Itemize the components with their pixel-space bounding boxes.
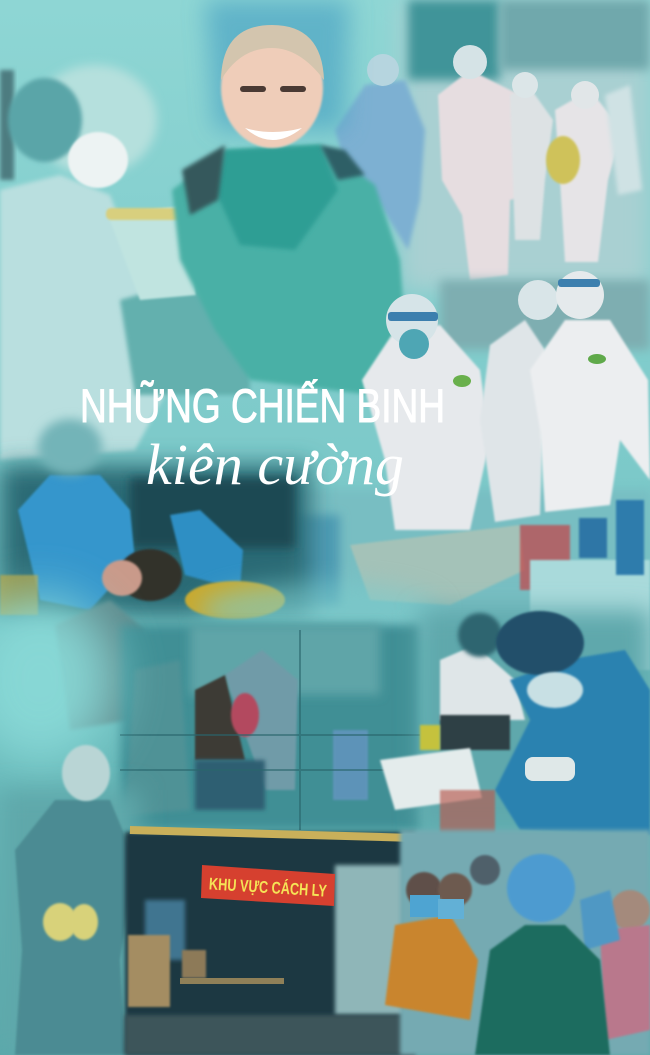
photo: field testing scene — [120, 625, 420, 830]
light haze band — [200, 582, 440, 638]
photo: left nurse with face shield — [0, 65, 250, 460]
photo: middle right team in white suits — [362, 271, 650, 530]
icon: water bottles — [579, 500, 644, 575]
photo: top right PPE team — [335, 0, 650, 290]
title: NHỮNG CHIẾN BINH — [80, 379, 445, 432]
left haze — [0, 595, 115, 765]
photo: patient bed — [290, 490, 650, 670]
photo: standing worker in gown — [0, 745, 140, 1055]
photo: crowd and green-scrub nurse — [385, 830, 650, 1055]
sign: khu vực cách ly — [201, 865, 335, 906]
photo: night checkpoint — [125, 826, 415, 1055]
sign: khu vực cách ly: KHU VỰC CÁCH LY — [208, 874, 328, 901]
photo: worker filling forms — [380, 610, 650, 840]
subtitle script: kiên cường — [146, 432, 404, 497]
photo: smiling health worker in green gown — [172, 25, 405, 395]
photo: left blue swabbing scene — [0, 419, 310, 730]
photo: top blue backdrop — [205, 0, 350, 130]
